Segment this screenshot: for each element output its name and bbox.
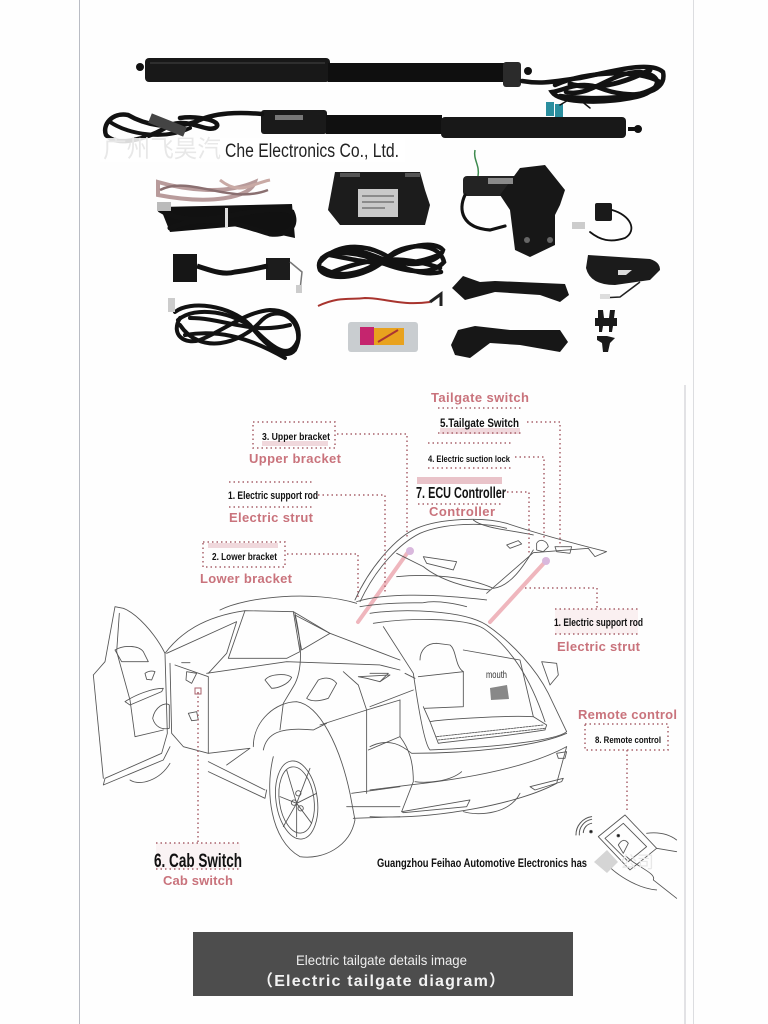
callout: electric support rod left <box>228 482 385 593</box>
coil cable centre <box>319 245 444 277</box>
wiring harness <box>157 180 295 238</box>
icon: trunk socket <box>490 685 509 700</box>
callout heading: Lower bracket <box>200 571 293 586</box>
panel: caption banner <box>193 932 573 996</box>
callout heading: Cab switch <box>163 873 233 888</box>
electric strut: lower <box>261 110 642 138</box>
callout text: 7. ECU Controller <box>416 485 506 502</box>
callout: lower bracket <box>200 542 358 600</box>
electric suction lock <box>462 150 565 257</box>
chart: vehicle line drawing <box>93 519 607 857</box>
cable coil: upper strut <box>522 67 663 118</box>
callout: electric support rod right <box>525 588 643 654</box>
watermark text: 广州飞昊汽 <box>103 136 221 163</box>
caption line one: Electric tailgate details image <box>296 952 467 968</box>
small tailgate switch <box>572 203 631 240</box>
callout text: 4. Electric suction lock <box>428 454 511 465</box>
callout text: 8. Remote control <box>595 735 661 746</box>
callout heading: Upper bracket <box>249 451 342 466</box>
rear of car: trunk and bumper <box>370 611 567 817</box>
callout heading: Electric strut <box>557 639 641 654</box>
icon: cab switch marker <box>195 688 201 694</box>
coil cable lower left <box>168 298 299 358</box>
callout text: 6. Cab Switch <box>154 851 242 872</box>
installation tool package <box>348 322 418 352</box>
callout: electric suction lock <box>428 443 544 540</box>
tailgate switch panel <box>586 255 660 299</box>
struts highlighted <box>358 552 545 622</box>
electric strut: upper <box>136 58 532 87</box>
callout heading: Remote control <box>578 707 677 722</box>
callout: upper bracket <box>249 422 407 537</box>
callout text: 1. Electric support rod <box>554 617 643 629</box>
callout: tailgate switch <box>431 390 560 547</box>
company name text: Che Electronics Co., Ltd. <box>225 141 399 162</box>
callout text: 1. Electric support rod <box>228 490 318 502</box>
tailgate lines <box>355 519 607 607</box>
icon: hand holding remote <box>576 815 677 898</box>
callout: cab switch <box>154 692 242 888</box>
callout heading: Controller <box>429 504 495 519</box>
callout: remote control <box>578 707 677 812</box>
watermark patch <box>100 138 405 162</box>
arrow: faded watermark <box>594 850 618 873</box>
faded company text: 公司 <box>620 853 654 872</box>
strut end caps <box>406 547 550 565</box>
callout text: 3. Upper bracket <box>262 431 330 443</box>
callout: ECU controller <box>416 477 529 553</box>
fuse wire <box>318 294 441 306</box>
label: mouth: mouth <box>486 670 507 681</box>
callout text: 2. Lower bracket <box>212 551 277 563</box>
text: company note: Guangzhou Feihao Automotive Electronics has <box>377 856 587 870</box>
adapter cable <box>173 254 302 293</box>
ECU controller box <box>328 172 430 225</box>
panel: product kit photo <box>100 58 663 358</box>
car body front <box>93 596 400 857</box>
lower bracket part <box>451 326 568 358</box>
callout text: 5.Tailgate Switch <box>440 416 519 430</box>
upper bracket part <box>452 276 569 302</box>
mounting bolts <box>595 310 617 352</box>
cable coil: lower strut <box>105 113 262 141</box>
caption line two: （Electric tailgate diagram） <box>257 972 505 990</box>
callout heading: Tailgate switch <box>431 390 529 405</box>
callout heading: Electric strut <box>229 510 314 525</box>
